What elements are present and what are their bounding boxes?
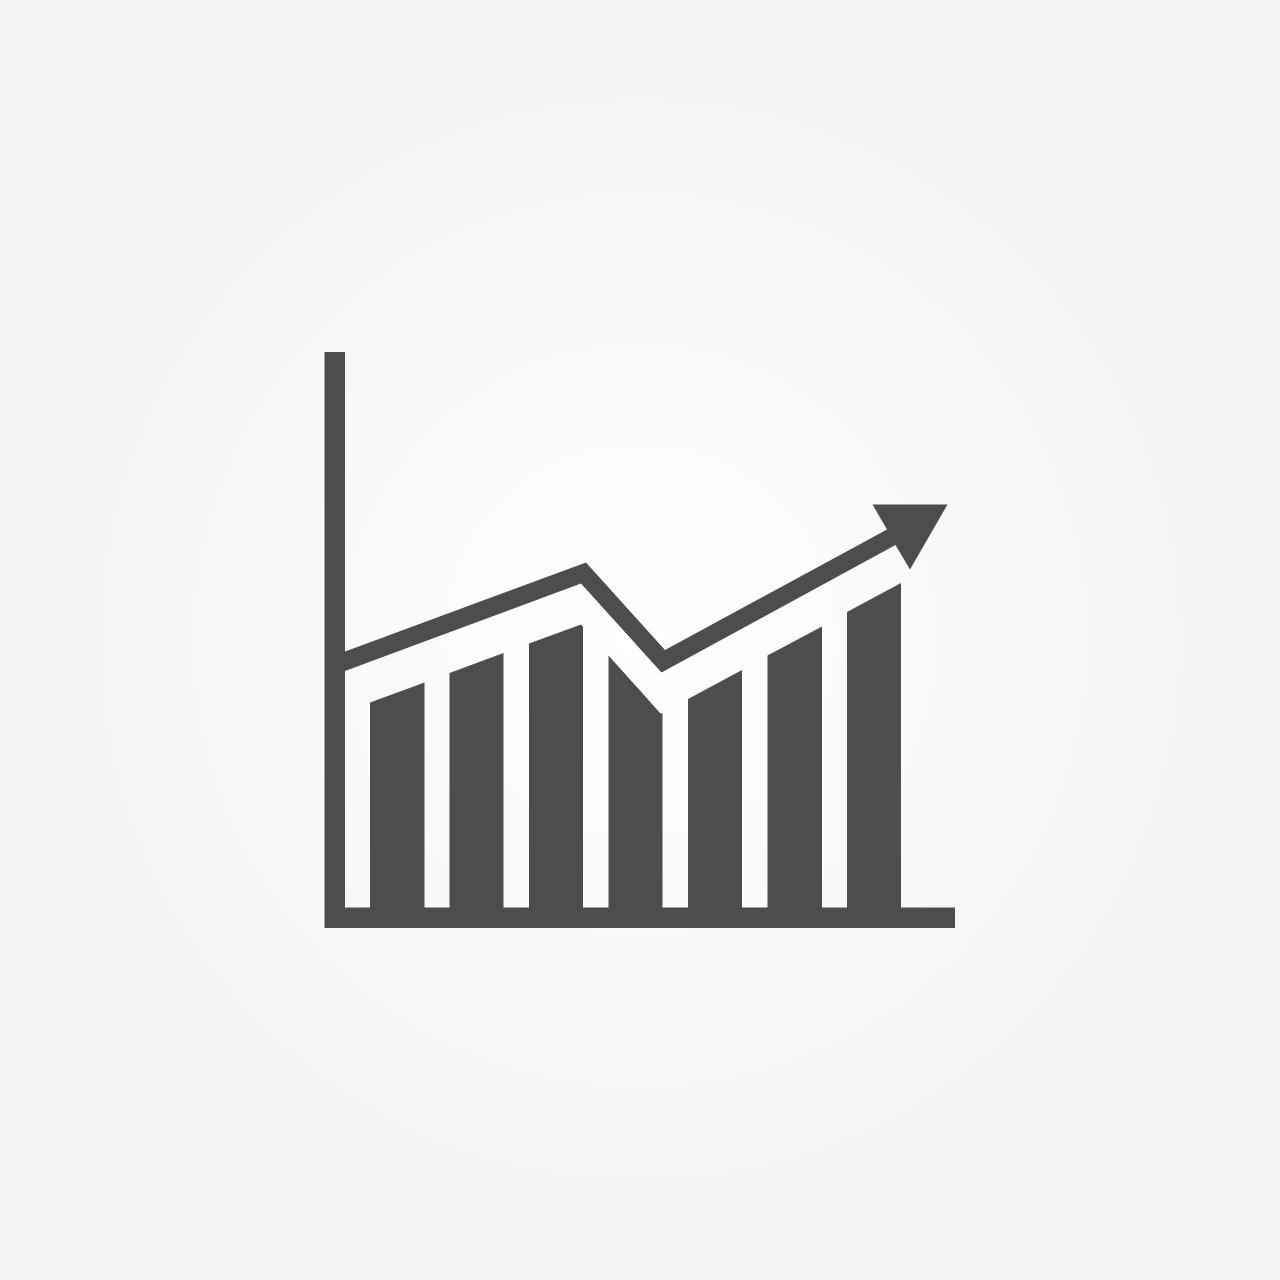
bar 1 xyxy=(370,682,424,908)
bar chart xyxy=(370,583,901,908)
chart icon xyxy=(324,352,955,928)
bar 3 xyxy=(529,624,583,908)
bar 5 xyxy=(688,670,742,908)
bar 4 xyxy=(608,656,662,908)
chart axes xyxy=(324,352,955,928)
bar 6 xyxy=(768,626,822,908)
bar 7 xyxy=(847,583,901,908)
trend line arrow xyxy=(345,504,948,672)
bar 2 xyxy=(450,653,504,908)
